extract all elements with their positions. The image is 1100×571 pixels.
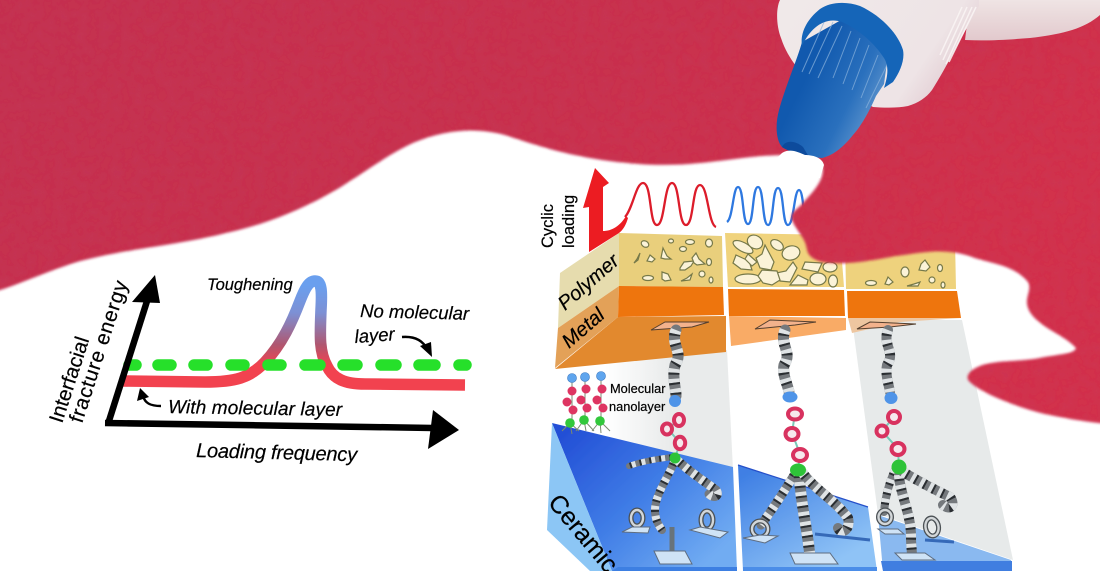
label: polymer: Polymer bbox=[554, 249, 625, 315]
label: no molecular layer: layer bbox=[354, 323, 396, 347]
polymer layer left face bbox=[558, 233, 619, 328]
polymer panel 2 bbox=[725, 232, 844, 287]
molecular nanolayer molecules bbox=[562, 372, 610, 434]
label: toughening: Toughening bbox=[207, 276, 293, 294]
polymer panel 3 bbox=[845, 240, 956, 289]
metal panel 3 bbox=[847, 291, 961, 318]
arrow to green line bbox=[402, 337, 432, 357]
glue drop below nozzle tip bbox=[770, 151, 824, 178]
metal panel 1 bbox=[618, 286, 724, 317]
molecular chain panel 3 bbox=[876, 330, 954, 560]
horizontal axis arrow bbox=[105, 410, 459, 449]
label: metal: Metal bbox=[558, 304, 610, 353]
polymer panel 1 bbox=[619, 233, 723, 287]
ceramic block panel 1 bbox=[547, 423, 737, 571]
ceramic block panel 3 bbox=[878, 515, 1012, 571]
cyclic loading arrow bbox=[583, 168, 628, 252]
label: molecular nanolayer: Molecular bbox=[610, 381, 666, 396]
red waveform bbox=[625, 183, 716, 227]
red curve with molecular layer bbox=[123, 281, 465, 385]
metal underside panel 1 bbox=[555, 316, 726, 369]
metal underside panel 2 bbox=[729, 316, 846, 346]
ceramic block panel 2 bbox=[738, 465, 877, 571]
panel: layered material diagram bbox=[539, 168, 1013, 571]
green dashed line no molecular layer bbox=[129, 359, 466, 371]
vertical axis arrow bbox=[108, 275, 160, 424]
label: no molecular layer: No molecular bbox=[360, 300, 470, 324]
label: no molecular layer bbox=[354, 300, 470, 347]
red paper background with white glue spill bbox=[0, 0, 1100, 424]
top anchor plates bbox=[651, 320, 916, 330]
label: cyclic loading: loading bbox=[560, 195, 578, 248]
glue bottle bbox=[777, 0, 1100, 158]
metal layer left face bbox=[555, 286, 619, 368]
nozzle ribs bbox=[802, 20, 887, 108]
blue cap collar bbox=[802, 3, 903, 88]
label: cyclic loading bbox=[539, 195, 578, 248]
y axis label: fracture energy bbox=[65, 277, 133, 426]
bottle shoulder bbox=[777, 0, 979, 108]
label: molecular nanolayer: nanolayer bbox=[609, 399, 666, 414]
metal underside panel 3 bbox=[848, 318, 961, 333]
y axis label: Interfacial bbox=[45, 334, 94, 426]
metal panel 2 bbox=[728, 289, 845, 316]
blue waveform bbox=[727, 187, 808, 225]
molecular chain panel 2 bbox=[743, 330, 870, 564]
label: with molecular layer: With molecular layer bbox=[168, 397, 343, 421]
molecular chain panel 1 bbox=[622, 330, 728, 564]
label: loading frequency: Loading frequency bbox=[196, 440, 358, 466]
nozzle tip shading bbox=[782, 142, 809, 157]
panel: loading frequency chart bbox=[45, 275, 470, 466]
blue nozzle cone bbox=[777, 15, 890, 158]
label: cyclic loading: Cyclic bbox=[539, 204, 557, 248]
shoulder ribs bbox=[940, 7, 976, 64]
arrow to red line bbox=[137, 388, 161, 406]
grey backing panels bbox=[605, 320, 1013, 560]
bottle back body bbox=[965, 0, 1100, 40]
label: molecular nanolayer bbox=[609, 381, 666, 414]
